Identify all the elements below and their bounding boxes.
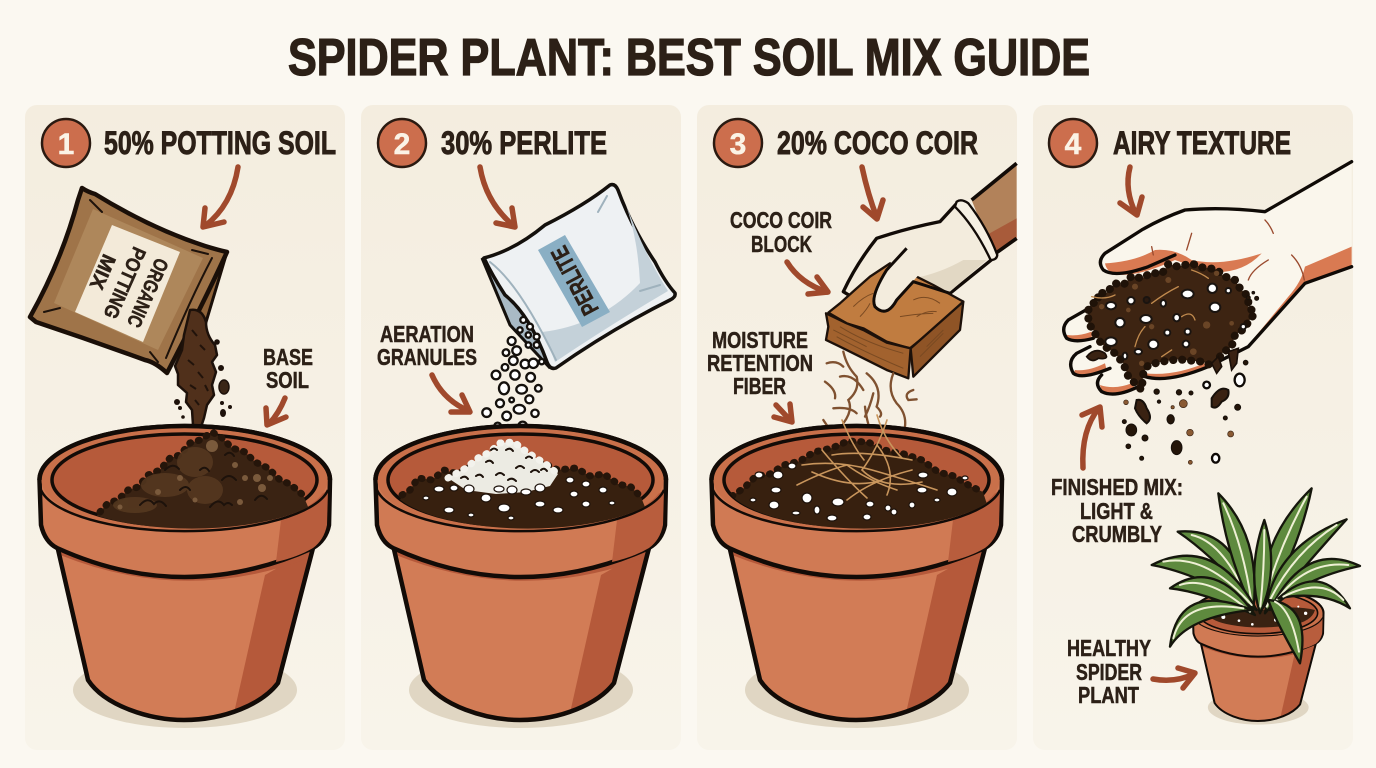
step number 4 (1049, 119, 1097, 167)
panel: step 1 potting soil (25, 105, 345, 750)
panel: step 4 airy texture (1033, 105, 1360, 750)
arrow: heading to hand (862, 167, 883, 219)
heading: airy texture: AIRY TEXTURE (1113, 125, 1291, 161)
label: moisture retention fiber: MOISTURE (712, 327, 808, 353)
arrow: heading to bag (203, 167, 238, 227)
arrow: base soil (266, 398, 286, 425)
label: coco coir block: BLOCK (751, 231, 812, 257)
step number 4: 4 (1065, 128, 1082, 161)
label: aeration granules: AERATION (380, 321, 474, 347)
label: finished mix: LIGHT & (1080, 498, 1153, 524)
bag label text (84, 243, 172, 330)
panel: step 3 coco coir (697, 105, 1017, 750)
icon: small pot with spider plant (1152, 488, 1360, 725)
label: moisture retention fiber: FIBER (733, 373, 786, 399)
arrow: finished mix (1082, 407, 1102, 468)
bag label text: MIX (84, 251, 119, 293)
heading: 30% perlite: 30% PERLITE (441, 125, 607, 161)
icon: terracotta pot with perlite (376, 426, 666, 728)
label: moisture retention fiber: RETENTION (707, 350, 813, 376)
title: SPIDER PLANT: BEST SOIL MIX GUIDE (288, 29, 1090, 87)
icon: terracotta pot with soil mound (40, 426, 330, 728)
arrow: aeration granules (432, 375, 470, 412)
bag label text: ORGANIC (122, 255, 172, 330)
arrow: moisture retention fiber (774, 404, 792, 422)
icon: falling perlite granules (482, 317, 544, 445)
icon: falling soil (174, 310, 232, 427)
label: aeration granules (377, 321, 477, 370)
heading: 50% potting soil: 50% POTTING SOIL (104, 125, 336, 161)
icon: gloved hand holding coir block (823, 163, 1017, 443)
step number 3 (714, 119, 762, 167)
label: base soil: SOIL (266, 367, 309, 393)
label: coco coir block: COCO COIR (730, 207, 832, 233)
bag label text: PERLITE (546, 241, 605, 319)
label: aeration granules: GRANULES (377, 344, 477, 370)
arrow: healthy spider plant (1153, 668, 1195, 688)
small pot (1193, 589, 1324, 725)
arrow: heading to bag (480, 167, 515, 227)
arrow: heading to hand (1120, 167, 1142, 215)
icon: open hand holding finished mix (1064, 162, 1352, 464)
step number 3: 3 (730, 128, 746, 161)
label: base soil (263, 344, 313, 393)
label: finished mix: FINISHED MIX: (1051, 474, 1183, 500)
pot soil (1207, 606, 1315, 627)
arrow: coco coir block (787, 262, 828, 294)
label: coco coir block (730, 207, 832, 257)
icon: potting mix bag (30, 188, 227, 373)
spider plant leaves (1152, 488, 1360, 663)
step number 1 (42, 119, 90, 167)
label: healthy spider plant: HEALTHY (1067, 635, 1151, 661)
label: finished mix: CRUMBLY (1072, 521, 1162, 547)
label: base soil: BASE (263, 344, 313, 370)
label: moisture retention fiber (707, 327, 813, 399)
bag label text: POTTING (99, 243, 150, 322)
heading: 20% coco coir: 20% COCO COIR (777, 125, 978, 161)
panel: step 2 perlite (361, 105, 681, 750)
step number 2: 2 (394, 128, 410, 161)
icon: terracotta pot with coco mix (712, 415, 1002, 728)
label: healthy spider plant: PLANT (1078, 682, 1139, 708)
label: healthy spider plant (1067, 635, 1151, 708)
label: finished mix (1051, 474, 1183, 547)
step number 1: 1 (58, 128, 74, 161)
label: healthy spider plant: SPIDER (1076, 659, 1142, 685)
step number 2 (378, 119, 426, 167)
icon: perlite bag (482, 185, 675, 368)
